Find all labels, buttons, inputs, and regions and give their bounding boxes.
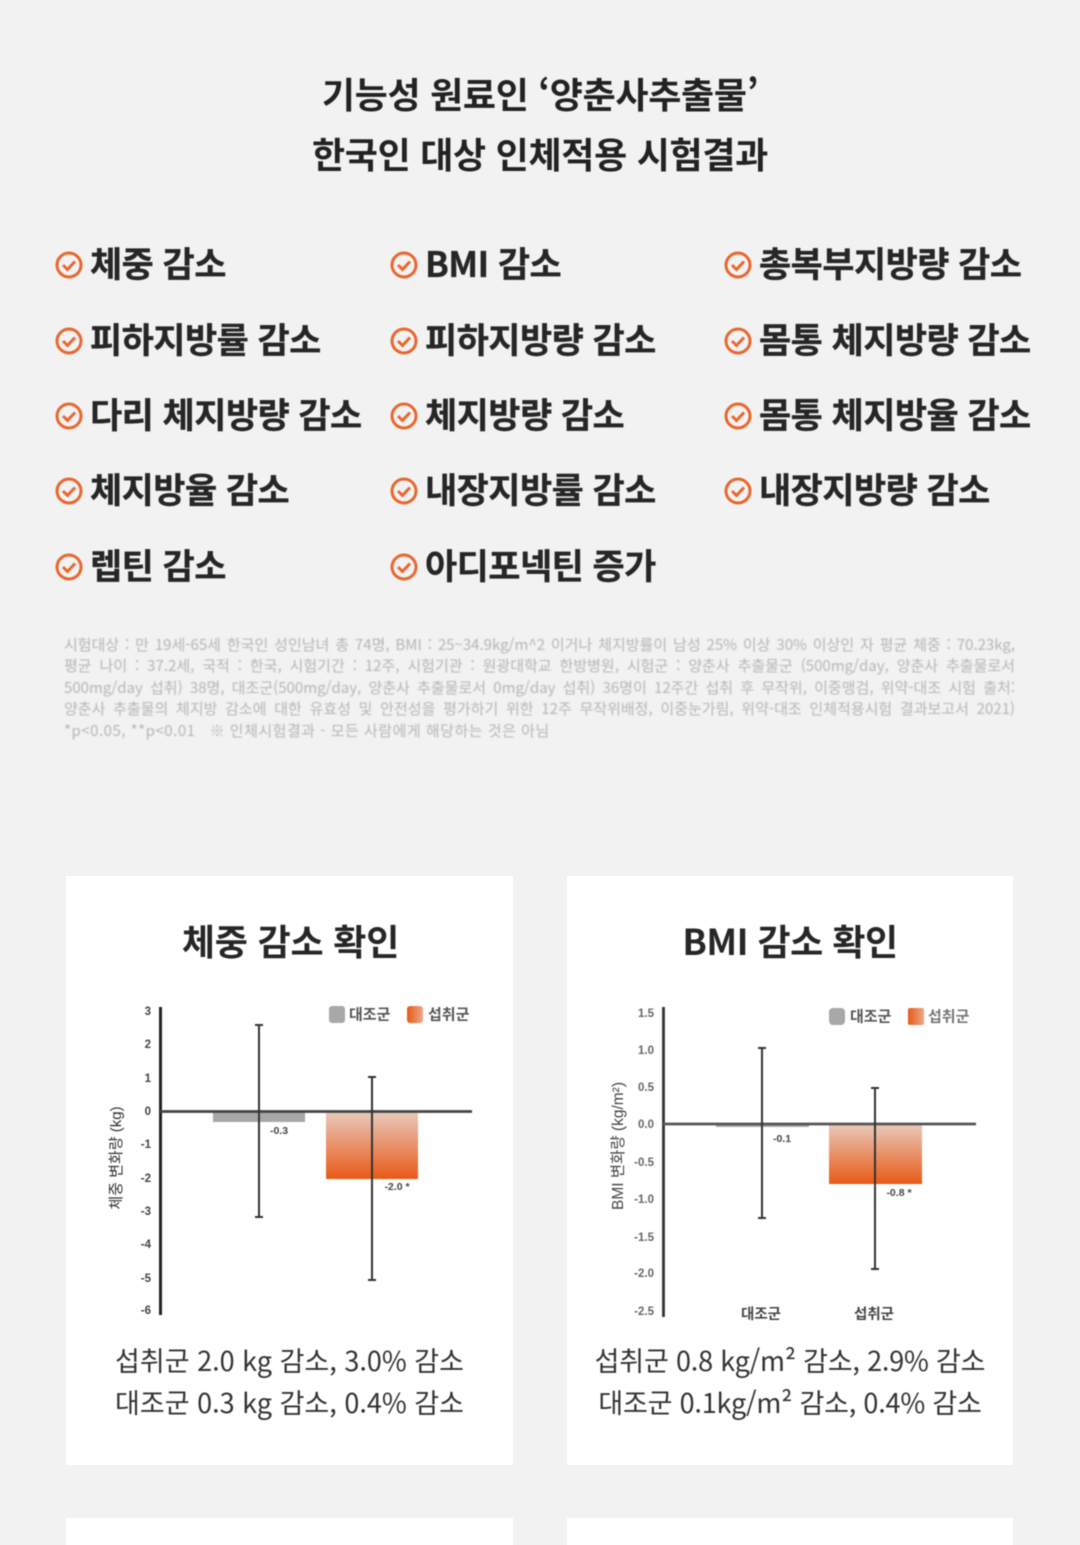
benefit list: 체지방율 감소 bbox=[90, 463, 289, 514]
caption: 섭취군 2.0 kg 감소, 3.0% 감소 bbox=[115, 1340, 464, 1379]
item: 체지방량 감소 bbox=[390, 388, 624, 439]
benefit list: 체지방량 감소 bbox=[425, 388, 624, 439]
chart: BMI change: 섭취군 bbox=[928, 1008, 970, 1026]
chart: weight change: 1 bbox=[145, 1073, 152, 1085]
caption: 섭취군 0.8 kg/m² 감소, 2.9% 감소 bbox=[595, 1340, 985, 1379]
chart: BMI change: 0.0 bbox=[638, 1119, 654, 1131]
item: 체지방율 감소 bbox=[54, 463, 290, 514]
panel: lower right card bbox=[567, 1518, 1013, 1545]
caption bbox=[595, 1340, 985, 1421]
chart: BMI change: -0.8 * bbox=[886, 1187, 912, 1199]
chart: weight change: -1 bbox=[141, 1139, 152, 1151]
item: 렙틴 감소 bbox=[54, 539, 226, 590]
chart: weight change: 대조군 bbox=[349, 1006, 391, 1024]
footnote: trial details: 500mg/day 섭취) 38명, 대조군(500mg/day, 양춘사 추출물로서 0mg/day 섭취) 36명이 12주간 섭취 후 무작위, 이중맹검, 위약-대조 시험 출처: bbox=[64, 677, 1015, 698]
benefit list: 아디포넥틴 증가 bbox=[425, 539, 656, 590]
footnote: trial details: 시험대상 : 만 19세-65세 한국인 성인남녀 총 74명, BMI : 25~34.9kg/m^2 이거나 체지방률이 남성 25% 이상 30% 이상인 자 평균 체중 : 70.23kg, bbox=[64, 634, 1015, 655]
item: 총복부지방량 감소 bbox=[724, 237, 1022, 288]
chart: weight change: 3 bbox=[145, 1006, 151, 1018]
chart: weight change: 체중 변화량 (kg) bbox=[108, 1106, 125, 1210]
chart: BMI change: BMI 변화량 (kg/m²) bbox=[609, 1082, 627, 1210]
chart: weight change: -2.0 * bbox=[384, 1181, 410, 1193]
title: 기능성 원료인 ‘양춘사추출물’ bbox=[322, 67, 758, 119]
benefit list: 내장지방률 감소 bbox=[425, 463, 656, 514]
chart: BMI change: 1.0 bbox=[638, 1045, 654, 1057]
item: 내장지방량 감소 bbox=[724, 463, 990, 514]
chart: weight change: -5 bbox=[141, 1273, 152, 1285]
item: 피하지방률 감소 bbox=[54, 313, 321, 364]
benefit list: 다리 체지방량 감소 bbox=[90, 388, 362, 439]
chart: weight change: -2 bbox=[141, 1173, 151, 1185]
panel heading: 체중 감소 확인 bbox=[182, 914, 399, 966]
chart: BMI change: 0.5 bbox=[638, 1082, 655, 1094]
benefit list: 렙틴 감소 bbox=[90, 539, 226, 590]
panel heading: BMI 감소 확인 bbox=[682, 914, 898, 966]
benefit list: 피하지방량 감소 bbox=[425, 313, 656, 364]
chart: weight change: -4 bbox=[141, 1239, 152, 1251]
chart: weight change: 섭취군 bbox=[428, 1006, 470, 1024]
panel: weight reduction bbox=[66, 876, 513, 1465]
benefit list: 내장지방량 감소 bbox=[759, 463, 990, 514]
chart: weight change: 2 bbox=[145, 1039, 151, 1051]
chart: BMI change bbox=[609, 1006, 977, 1323]
item: 다리 체지방량 감소 bbox=[54, 388, 362, 439]
item: 내장지방률 감소 bbox=[390, 463, 656, 514]
footnote: trial details: 평균 나이 : 37.2세, 국적 : 한국, 시험기간 : 12주, 시험기관 : 원광대학교 한방병원, 시험군 : 양춘사 추출물군 (500mg/day, 양춘사 추출물로서 bbox=[64, 655, 1015, 676]
item: 피하지방량 감소 bbox=[390, 313, 656, 364]
caption bbox=[115, 1340, 464, 1421]
benefit list bbox=[54, 237, 1031, 590]
benefit list: 몸통 체지방량 감소 bbox=[759, 313, 1031, 364]
item: 몸통 체지방율 감소 bbox=[724, 388, 1031, 439]
chart: weight change: -6 bbox=[141, 1305, 151, 1317]
caption: 대조군 0.3 kg 감소, 0.4% 감소 bbox=[115, 1382, 464, 1421]
chart: BMI change: 1.5 bbox=[638, 1008, 655, 1020]
benefit list: 체중 감소 bbox=[90, 237, 226, 288]
item: 아디포넥틴 증가 bbox=[390, 539, 656, 590]
item: BMI 감소 bbox=[390, 237, 562, 288]
chart: BMI change: 섭취군 bbox=[854, 1306, 894, 1323]
chart: BMI change: -1.5 bbox=[634, 1232, 655, 1244]
chart: BMI change: -2.5 bbox=[634, 1306, 655, 1318]
chart: BMI change: -0.1 bbox=[773, 1133, 791, 1145]
benefit list: 피하지방률 감소 bbox=[90, 313, 321, 364]
chart: weight change: -3 bbox=[141, 1206, 151, 1218]
item: 몸통 체지방량 감소 bbox=[724, 313, 1031, 364]
chart: BMI change: 대조군 bbox=[741, 1306, 781, 1323]
chart: BMI change: -2.0 bbox=[634, 1268, 654, 1280]
chart: BMI change: 대조군 bbox=[850, 1008, 892, 1026]
panel: lower left card bbox=[66, 1518, 513, 1545]
title bbox=[312, 67, 768, 179]
chart: weight change bbox=[108, 1005, 473, 1317]
title: 한국인 대상 인체적용 시험결과 bbox=[312, 127, 768, 179]
benefit list: 총복부지방량 감소 bbox=[759, 237, 1021, 288]
chart: BMI change: -1.0 bbox=[634, 1194, 654, 1206]
footnote: trial details bbox=[64, 634, 1015, 741]
benefit list: BMI 감소 bbox=[425, 237, 561, 288]
chart: weight change: 0 bbox=[145, 1106, 151, 1118]
caption: 대조군 0.1kg/m² 감소, 0.4% 감소 bbox=[598, 1382, 982, 1421]
chart: weight change: -0.3 bbox=[270, 1125, 288, 1137]
panel: BMI reduction bbox=[567, 876, 1013, 1465]
item: 체중 감소 bbox=[54, 237, 226, 288]
benefit list: 몸통 체지방율 감소 bbox=[759, 388, 1031, 439]
chart: BMI change: -0.5 bbox=[634, 1157, 655, 1169]
footnote: trial details: *p<0.05, **p<0.01 ※ 인체시험결과 - 모든 사람에게 해당하는 것은 아님 bbox=[64, 720, 550, 741]
footnote: trial details: 양춘사 추출물의 체지방 감소에 대한 유효성 및 안전성을 평가하기 위한 12주 무작위배정, 이중눈가림, 위약-대조 인체적용시험 결과보고서 2021) bbox=[64, 698, 1015, 719]
